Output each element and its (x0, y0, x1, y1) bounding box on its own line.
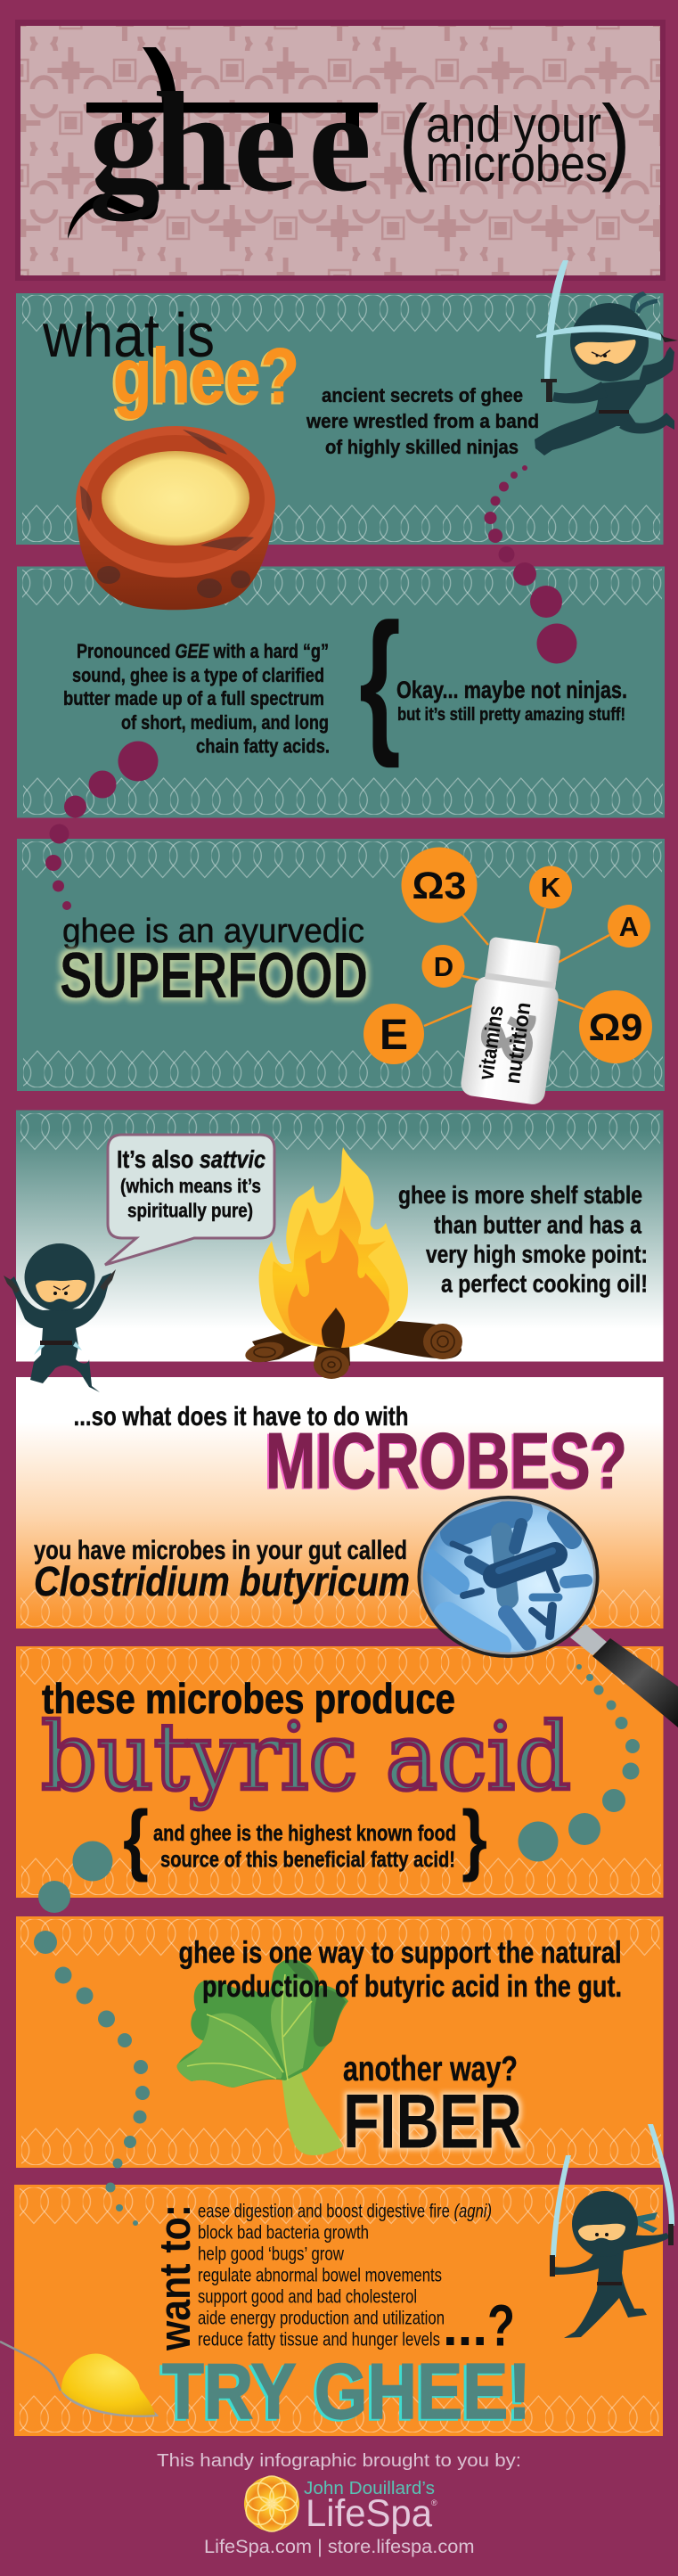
speech bubble (105, 1135, 274, 1265)
speech bubble: spiritually pure) (127, 1200, 253, 1221)
vitamin bottle: & (462, 1005, 552, 1070)
text: you have microbes: you have microbes in your gut called (34, 1536, 407, 1565)
heading: what is: what is (42, 300, 215, 370)
vitamin bottle (457, 935, 566, 1106)
text: want to: want to: (151, 2204, 200, 2351)
panel: pronounced (17, 567, 665, 818)
text: highest known food source: and ghee is the highest known food (153, 1821, 456, 1846)
ninja: jumping with swords (535, 260, 678, 455)
vitamin labels: D (434, 951, 453, 982)
ellipsis and question mark (443, 2293, 515, 2359)
ninja: with speech (4, 1243, 116, 1392)
text: highest known food source (153, 1821, 456, 1872)
text: ancient secrets (306, 384, 539, 458)
text: one way to support (178, 1936, 622, 2004)
ellipsis and question mark: ... (443, 2297, 487, 2357)
vitamin labels: Ω3 (412, 865, 467, 907)
heading: ghee is an ayurvedic: ghee is an ayurvedic (62, 913, 364, 950)
icon: ghee pot (76, 426, 275, 610)
vitamin labels: E (380, 1012, 408, 1059)
text: okay maybe not ninjas: Okay... maybe not ninjas. (396, 677, 627, 703)
panel: superfood (17, 839, 665, 1106)
list: benefits: block bad bacteria growth (198, 2222, 369, 2243)
connector lines (424, 908, 609, 1026)
text: websites: LifeSpa.com | store.lifespa.com (204, 2537, 474, 2557)
list: benefits: reduce fatty tissue and hunger levels (198, 2329, 440, 2350)
text: pronunciation paragraph: Pronounced GEE with a hard “g” (77, 640, 329, 662)
flames (259, 1147, 408, 1348)
speech bubble: (which means it’s (120, 1175, 261, 1197)
ellipsis and question mark: ? (487, 2293, 515, 2359)
vitamin bottle: nutrition (501, 1001, 536, 1086)
title subtitle: and your microbes (398, 85, 631, 193)
text: pronunciation paragraph: of short, medium, and long (121, 711, 329, 734)
list: benefits: help good ‘bugs’ grow (198, 2244, 345, 2264)
text: pronunciation paragraph: chain fatty acids. (196, 734, 330, 758)
footer (157, 2451, 521, 2557)
text: these microbes produce: these microbes produce (42, 1675, 455, 1722)
title subtitle: and your microbes: ( (398, 85, 428, 193)
icon: campfire (243, 1147, 462, 1379)
text: so what does it have to do with: ...so what does it have to do with (73, 1402, 408, 1432)
panel: title (15, 20, 666, 281)
panel: what is ghee (16, 293, 663, 545)
vitamin labels: Ω9 (588, 1006, 643, 1049)
title word: ghee: ghee (89, 62, 372, 222)
icon: leafy green (177, 1959, 348, 2155)
text: brought to you by: This handy infographic brought to you by: (157, 2451, 521, 2471)
panel: fiber (16, 1916, 663, 2168)
vitamin circles (364, 847, 652, 1064)
vitamin bottle: vitamins (474, 1004, 509, 1081)
logo text: LifeSpa (306, 2492, 432, 2535)
text: highest known food source: source of this beneficial fatty acid! (160, 1847, 455, 1872)
text: okay maybe not ninjas (396, 677, 627, 725)
list: benefits: aide energy production and utilization (198, 2308, 445, 2328)
list: benefits (198, 2201, 492, 2350)
title subtitle: and your microbes: ) (601, 85, 631, 193)
braces: { (123, 1793, 149, 1883)
heading: butyric acid: butyric acid (41, 1702, 571, 1811)
text: ancient secrets: of highly skilled ninjas (325, 436, 519, 458)
text: shelf stable (398, 1181, 648, 1298)
panel: try ghee (14, 2185, 663, 2436)
braces: } (462, 1793, 487, 1883)
handle (570, 1624, 678, 1727)
heading: ghee?: ghee? (113, 333, 299, 419)
logs (243, 1321, 462, 1379)
text: clostridium butyricum: Clostridium butyricum (34, 1558, 410, 1604)
teal dots (34, 1664, 640, 2226)
heading: try ghee: TRY GHEE! (162, 2347, 531, 2435)
text: another way: another way? (343, 2050, 518, 2088)
panel: sattvic and fire (16, 1111, 663, 1362)
brace: { (359, 590, 401, 768)
logo text: John Douillard’s (304, 2479, 435, 2498)
heading: fiber: FIBER (343, 2079, 522, 2164)
text: okay maybe not ninjas: but it’s still pretty amazing stuff! (397, 705, 625, 725)
title subtitle: and your microbes: and your (426, 96, 601, 153)
panel: microbes (16, 1377, 663, 1628)
list: benefits: regulate abnormal bowel movements (198, 2265, 442, 2285)
icon: magnifying glass (419, 1497, 678, 1727)
ninja: running with swords (550, 2124, 674, 2338)
icon: spoon of ghee (0, 2342, 159, 2417)
list: benefits: support good and bad cholesterol (198, 2286, 417, 2307)
text: pronunciation paragraph: sound, ghee is a type of clarified (72, 664, 324, 686)
speech bubble: It’s also sattvic (117, 1145, 265, 1173)
text: ancient secrets: ancient secrets of ghee (322, 384, 523, 406)
braces (123, 1793, 487, 1883)
microbes (429, 1511, 586, 1646)
list: benefits: ease digestion and boost digestive fire (agni) (198, 2201, 492, 2221)
text: ancient secrets: were wrestled from a band (306, 410, 539, 432)
vitamin labels: A (619, 911, 639, 942)
plum dots (45, 465, 577, 910)
heading: superfood: SUPERFOOD (60, 940, 368, 1012)
panel: butyric acid (16, 1646, 663, 1898)
logo mark (244, 2476, 299, 2531)
text: pronunciation paragraph (63, 640, 330, 758)
logo text: ® (431, 2498, 437, 2507)
vitamin labels (380, 865, 643, 1059)
title subtitle: and your microbes: microbes (426, 135, 608, 193)
lens (419, 1497, 597, 1656)
text: pronunciation paragraph: butter made up of a full spectrum (63, 687, 324, 710)
vitamin labels: K (541, 872, 561, 903)
